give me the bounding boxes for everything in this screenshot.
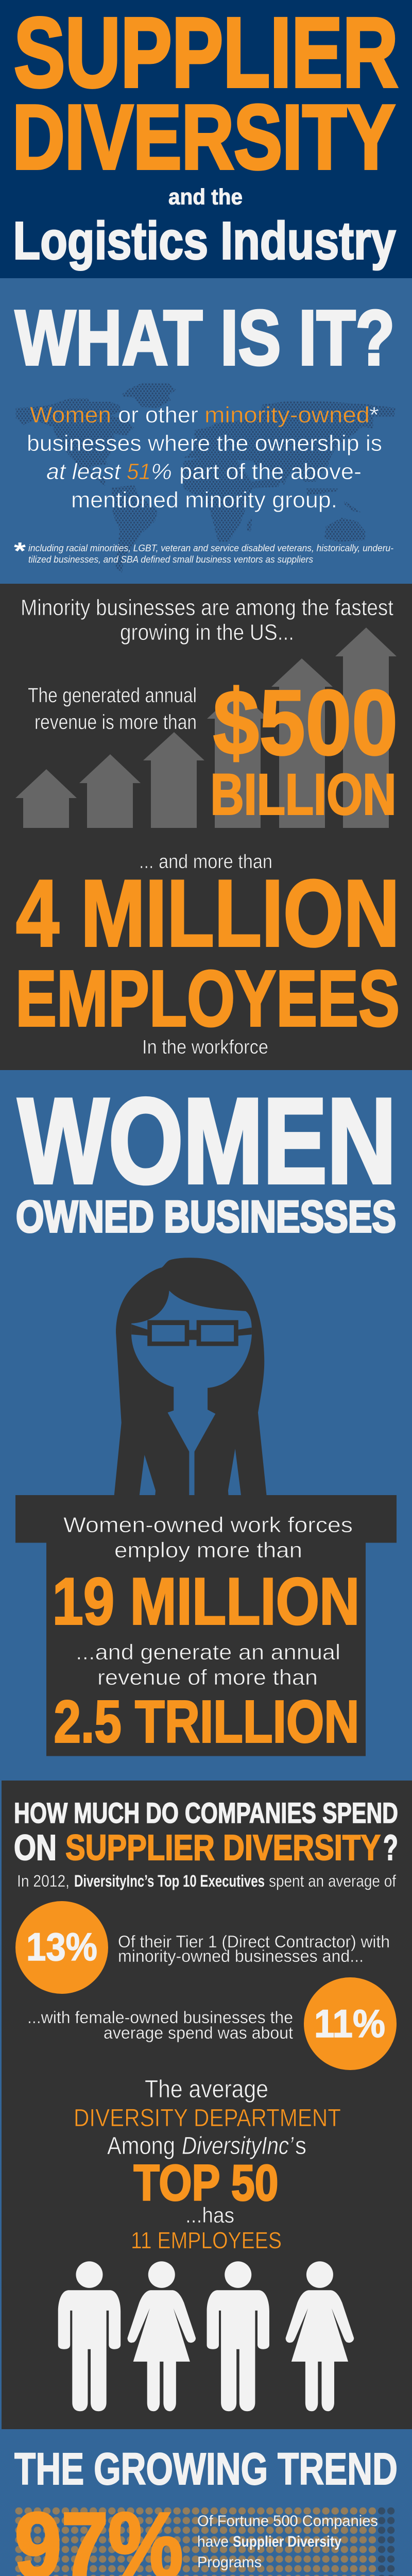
footnote: tilized businesses, and SBA defined small business ventors as suppliers (28, 554, 313, 565)
definition text: part of the above- (179, 459, 362, 484)
stat circle: 13 percent: 13% (26, 1925, 97, 1969)
podium text: revenue (76, 1640, 340, 1689)
footnote: including racial minorities, LGBT, veteran and service disabled veterans, historically, underu- (28, 543, 393, 553)
definition text (27, 402, 382, 513)
icons: people (58, 2261, 354, 2411)
podium text: employ (63, 1513, 353, 1562)
text: in the workforce: In the workforce (142, 1037, 268, 1058)
text: average department (74, 2076, 341, 2160)
text: tier 1: minority-owned businesses and... (118, 1946, 364, 1965)
definition text: mentioned minority group. (71, 487, 337, 513)
text: and more than: ... and more than (139, 851, 272, 873)
icon: businesswoman (114, 1258, 267, 1497)
podium text: revenue: revenue of more than (97, 1665, 318, 1689)
text: tier 1: Of their Tier 1 (Direct Contractor) with (118, 1932, 390, 1951)
panel: company spend (0, 1781, 412, 2429)
stat circle: 11 percent: 11% (314, 2002, 385, 2046)
text: female owned: average spend was about (104, 2023, 293, 2042)
text: fortune 500: Supplier Diversity (233, 2533, 341, 2550)
subtitle: and the: and the (168, 184, 243, 209)
heading: how much: ? (383, 1827, 398, 1868)
footnote (14, 537, 393, 565)
text: female owned (27, 2008, 293, 2042)
world map dots (15, 383, 396, 573)
dot chart: 97 percent (14, 2507, 396, 2576)
text: female owned: ...with female-owned businesses the (27, 2008, 293, 2027)
text: average department: s (295, 2132, 306, 2160)
text: average department: DIVERSITY DEPARTMENT (74, 2105, 341, 2132)
definition text: businesses where the ownership is (27, 431, 382, 456)
definition text: % (151, 459, 172, 484)
heading: how much: ON (14, 1827, 57, 1868)
footnote: * (14, 537, 26, 564)
heading: how much (14, 1797, 398, 1868)
panel: minority businesses (0, 584, 412, 1070)
stat: 19 million: 19 MILLION (53, 1564, 359, 1638)
stat circle: 11 percent (304, 1977, 397, 2070)
stat: 4 million employees (15, 860, 400, 1043)
text: fortune 500 (197, 2513, 378, 2571)
text: has: ...has (185, 2203, 234, 2227)
definition text: minority-owned (204, 402, 370, 428)
stat: 11 employees: 11 EMPLOYEES (131, 2227, 282, 2253)
subheading: DiversityInc’s Top 10 Executives (74, 1872, 265, 1890)
revenue text (28, 684, 197, 734)
subheading: spent an average of (269, 1872, 396, 1890)
text: average department: The average (145, 2076, 268, 2103)
definition text: 51 (127, 459, 151, 484)
intro text: growing in the US... (120, 620, 294, 645)
definition text: or other (118, 402, 198, 428)
text: fortune 500: Programs (197, 2554, 262, 2571)
text: fortune 500: have (197, 2533, 229, 2550)
panel: title header (0, 0, 412, 278)
subheading (17, 1872, 396, 1890)
text: average department: DiversityInc’ (182, 2132, 294, 2160)
panel: what is it (0, 278, 412, 585)
revenue text: The generated annual (28, 684, 197, 707)
rising arrows (15, 628, 397, 828)
revenue text: revenue is more than (35, 711, 197, 734)
panel: women owned businesses (0, 1070, 412, 1781)
text: fortune 500: Of Fortune 500 Companies (197, 2513, 378, 2530)
subheading: In 2012, (17, 1872, 70, 1890)
panel: growing trend (0, 2429, 412, 2576)
podium text: revenue: ...and generate an annual (76, 1640, 340, 1664)
podium (15, 1495, 397, 1756)
text: tier 1 (118, 1932, 390, 1965)
definition text: Women (30, 402, 111, 428)
stat: 500 billion (210, 671, 398, 826)
stat: top 50: TOP 50 (134, 2155, 278, 2211)
podium text: employ: Women-owned work forces (63, 1513, 353, 1537)
definition text: at least (46, 459, 122, 484)
definition text: * (369, 402, 379, 428)
intro text (21, 595, 393, 645)
text: average department: Among (107, 2132, 175, 2160)
podium text: employ: employ more than (114, 1538, 302, 1562)
stat circle: 13 percent (15, 1901, 108, 1994)
